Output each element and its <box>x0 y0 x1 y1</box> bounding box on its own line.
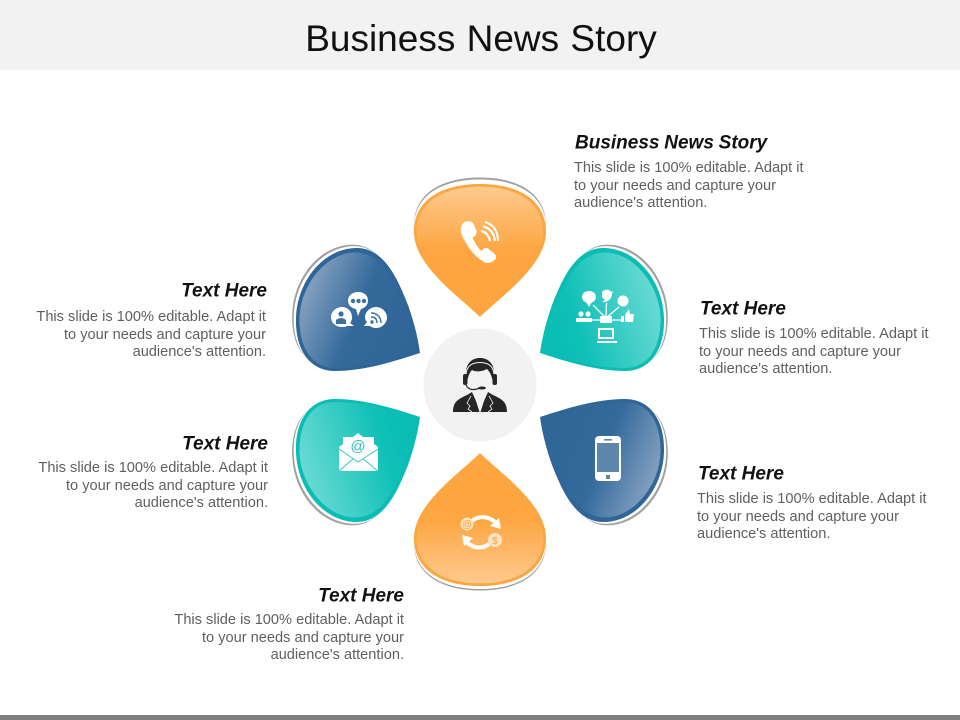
icon: social network <box>576 290 634 343</box>
text block: lower right: This slide is 100% editable. Adapt it <box>697 491 927 507</box>
text block: upper right: This slide is 100% editable. Adapt it <box>699 326 929 342</box>
header band <box>0 0 960 70</box>
text block: upper left: Text Here <box>181 280 267 302</box>
icon: speech bubbles <box>331 292 387 328</box>
footer bar <box>0 715 960 720</box>
text block: upper left: to your needs and capture your <box>64 327 266 343</box>
text block: upper right: Text Here <box>700 298 786 320</box>
icon: envelope: @ <box>350 438 366 455</box>
text block: lower right: Text Here <box>698 464 784 484</box>
petal: top orange <box>414 178 546 317</box>
text block: lower left: to your needs and capture your <box>66 478 268 494</box>
text block: upper left <box>36 280 267 360</box>
text block: bottom: to your needs and capture your <box>202 630 404 646</box>
text block: upper left: This slide is 100% editable. Adapt it <box>36 309 266 325</box>
text block: bottom: Text Here <box>318 586 404 606</box>
text block: lower right: audience's attention. <box>697 526 830 542</box>
center circle <box>424 328 536 442</box>
text block: Business News Story: to your needs and capture your <box>574 178 776 194</box>
petal: bottom orange <box>414 453 546 590</box>
text block: lower left: This slide is 100% editable. Adapt it <box>38 460 268 476</box>
icon: smartphone <box>595 436 621 481</box>
text block: bottom: audience's attention. <box>271 647 404 663</box>
text block: bottom <box>174 586 404 663</box>
text block: lower right <box>697 464 927 542</box>
title: Business News Story <box>305 18 657 59</box>
text block: upper right: audience's attention. <box>699 361 832 377</box>
text block: lower left: audience's attention. <box>135 495 268 511</box>
text block: Business News Story: Business News Story <box>575 132 769 154</box>
icon: email money cycle: $ <box>492 536 498 547</box>
text block: bottom: This slide is 100% editable. Adapt it <box>174 612 404 628</box>
icon: email money cycle <box>460 517 502 547</box>
petal: upper left blue <box>292 245 420 371</box>
text block: upper left: audience's attention. <box>133 344 266 360</box>
icon: email money cycle: @ <box>462 520 472 530</box>
text block: lower right: to your needs and capture your <box>697 509 899 525</box>
petal: lower left teal <box>292 399 420 525</box>
text block: Business News Story: This slide is 100% editable. Adapt it <box>574 160 804 176</box>
text block: upper right: to your needs and capture your <box>699 344 901 360</box>
text block: Business News Story: audience's attention. <box>574 195 707 211</box>
text block: lower left: Text Here <box>182 434 268 454</box>
petal: upper right teal <box>540 245 668 371</box>
text block: lower left <box>38 434 268 511</box>
icon: call center agent <box>453 358 507 412</box>
petal: lower right blue <box>540 399 668 525</box>
icon: phone <box>461 222 498 263</box>
text block: Business News Story <box>574 132 804 211</box>
text block: upper right <box>699 298 929 377</box>
